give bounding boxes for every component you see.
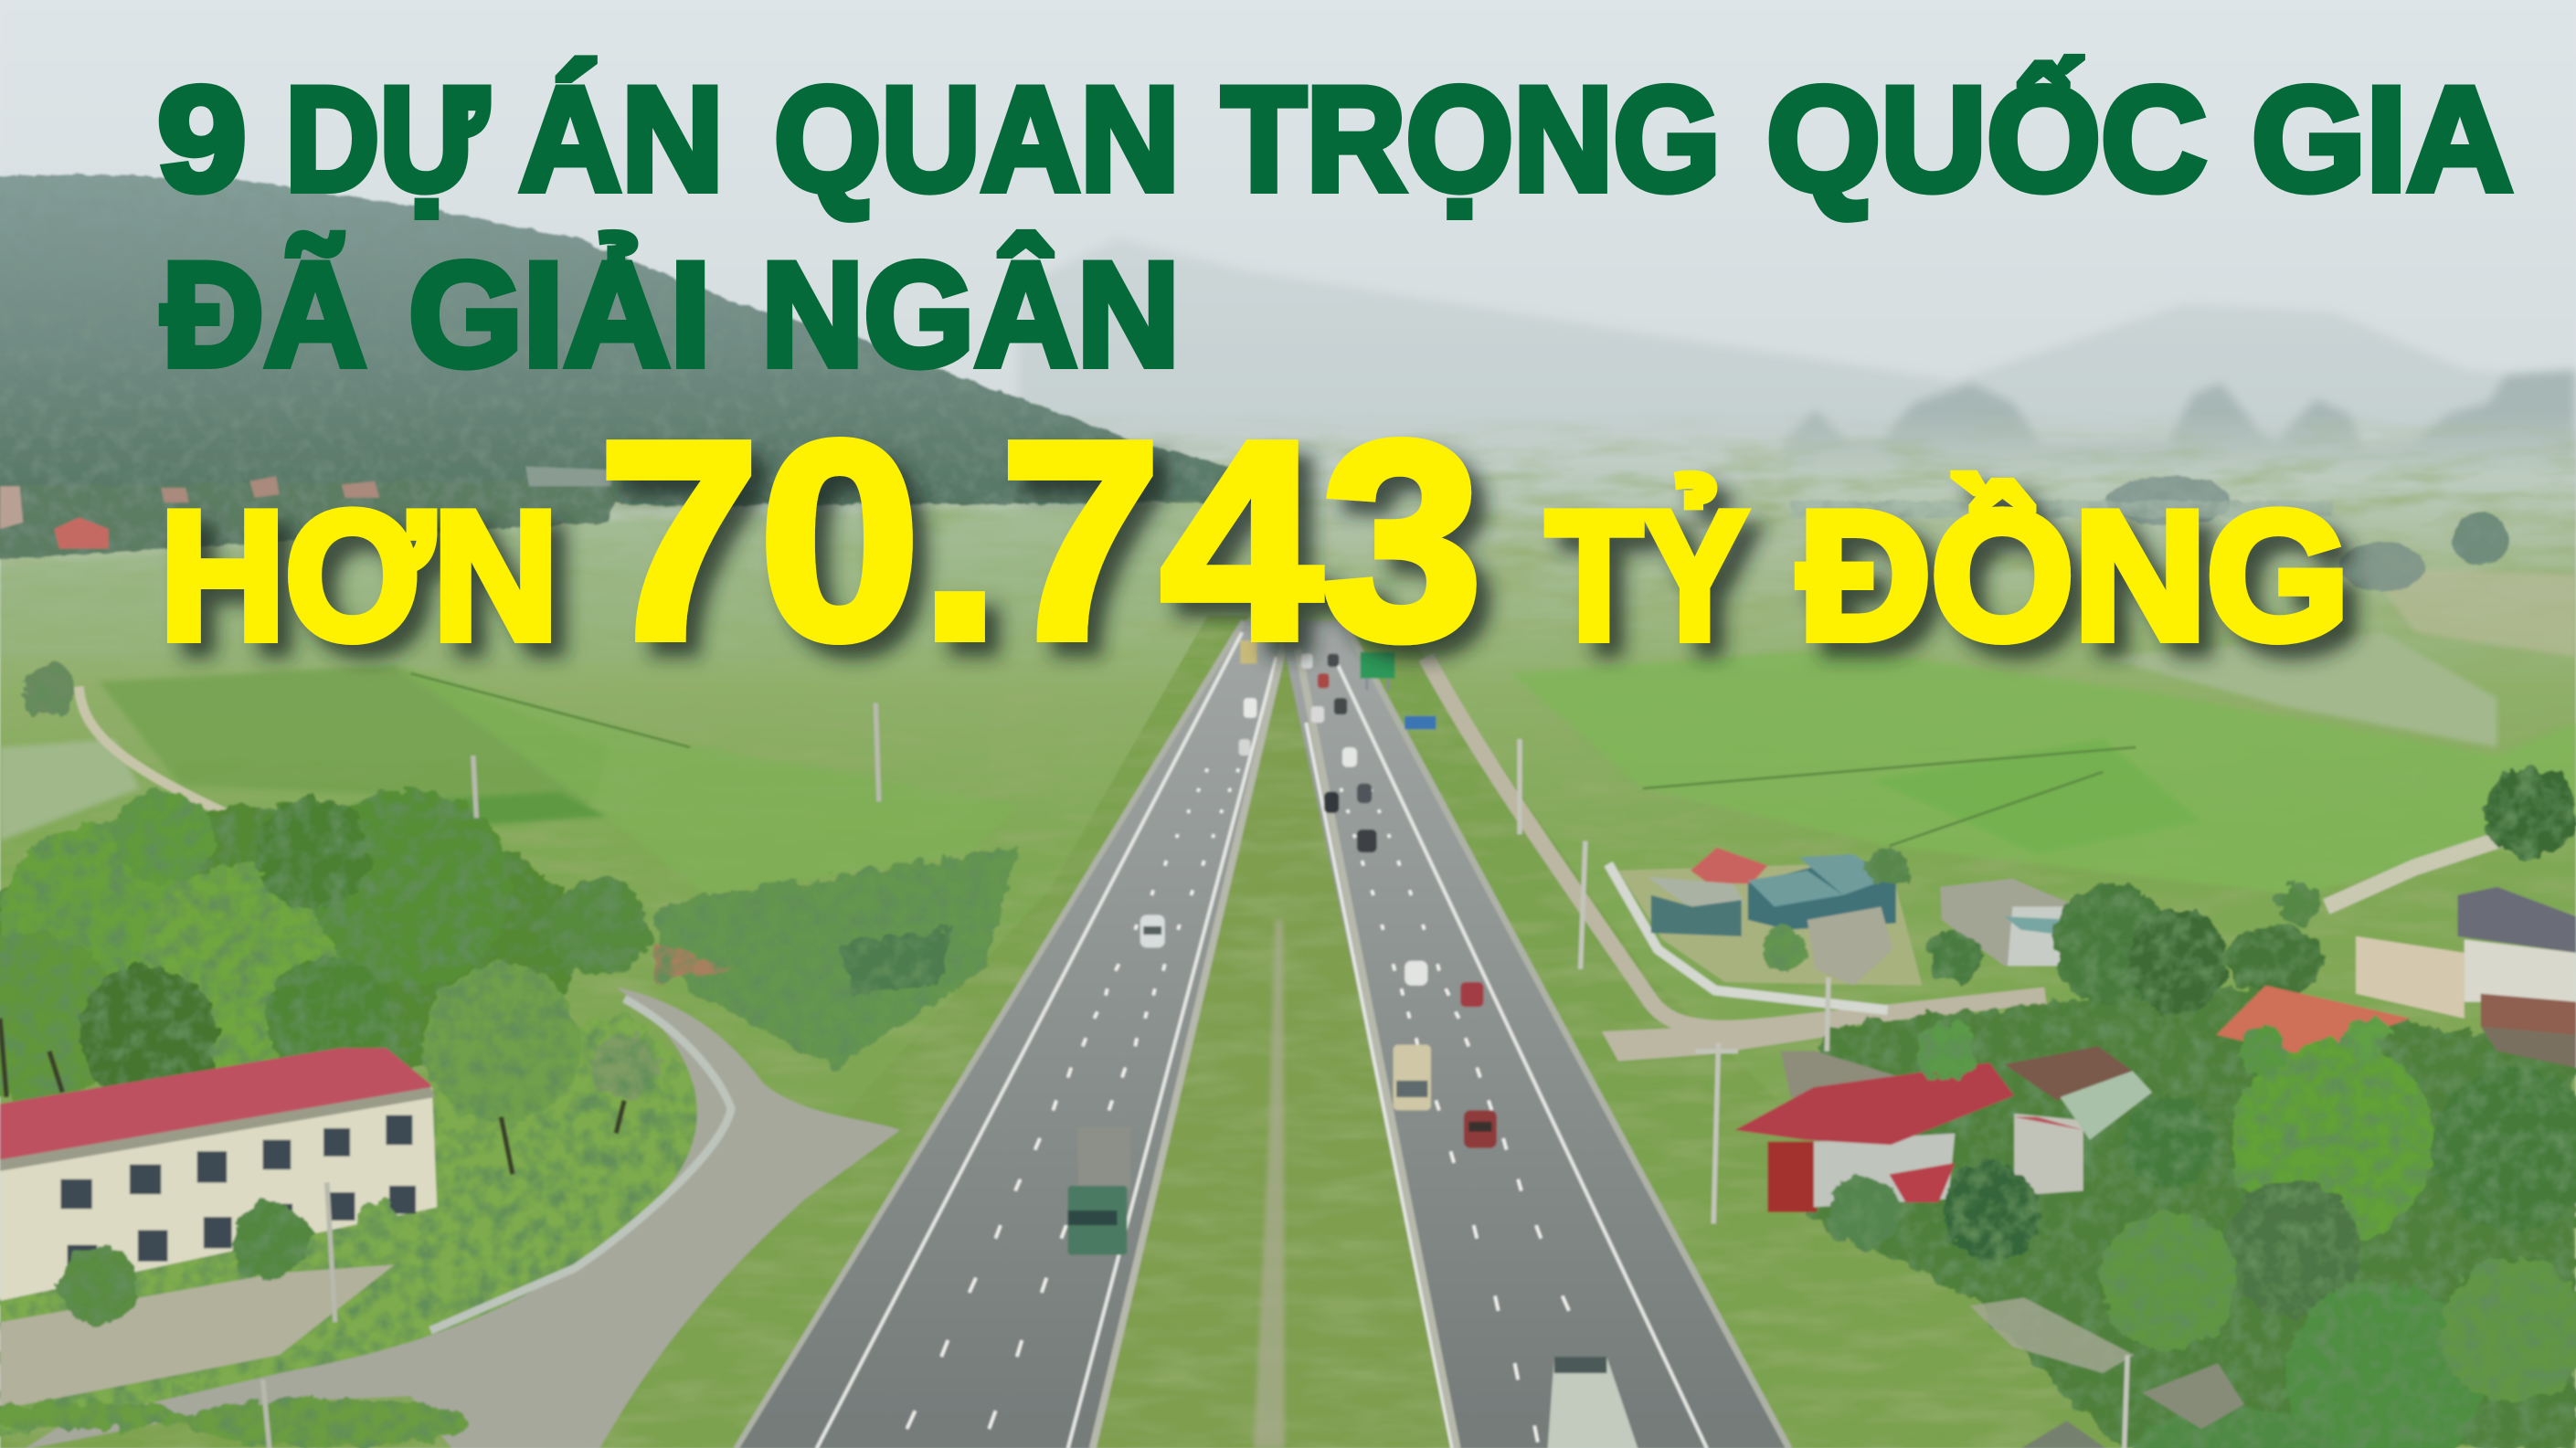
title line 1: TRỌNG (1222, 57, 1721, 222)
left forested mountain (0, 174, 1265, 506)
right carriageway (1278, 621, 1789, 1448)
sky (0, 0, 2576, 525)
median grass (1093, 621, 1458, 1448)
unit: ĐỒNG (1798, 474, 2349, 678)
distant mountains (1019, 238, 2576, 525)
village ground and greenery base (1807, 986, 2576, 1448)
utility poles left (263, 703, 879, 1448)
road junction (1602, 1015, 1840, 1061)
title line 1: GIA (2252, 57, 2513, 222)
embankments and bank grass (542, 616, 1248, 1448)
distant tree lines (1791, 476, 2508, 591)
title line 2: NGÂN (761, 232, 1180, 397)
right side lane (2327, 836, 2510, 906)
houses cluster upper (1648, 848, 2078, 986)
title line 1: QUỐC (1766, 57, 2207, 222)
bare ground yard (0, 1264, 394, 1410)
title line 2: ĐÃ (162, 232, 366, 397)
grass around building (0, 1010, 739, 1437)
field ridge lines (410, 673, 2136, 846)
utility poles right (1520, 739, 2127, 1448)
left hillside village (0, 467, 624, 562)
rubble and small sheds (1970, 1297, 2244, 1448)
building with red roof (0, 1048, 437, 1301)
yard ground (1618, 862, 1922, 986)
amount highlight (160, 384, 2349, 698)
right large houses (2216, 887, 2576, 1068)
lower right tree mass (1829, 1017, 2576, 1448)
left carriageway (736, 621, 1289, 1448)
left path (79, 687, 243, 821)
tree by left path (23, 663, 76, 716)
prefix: HƠN (160, 474, 558, 678)
title line 1: QUAN (774, 57, 1180, 222)
amount number: 70.743 (599, 384, 1482, 698)
tree trunks (0, 1019, 624, 1174)
title line 1: 9 (157, 57, 247, 222)
field patches (0, 501, 2576, 895)
title line 1 (157, 57, 2513, 222)
title line 1: DỰ (285, 57, 489, 222)
yard fence wall (1608, 864, 1888, 1010)
vehicles on left carriageway (1068, 640, 1256, 1255)
left-side access road (25, 988, 900, 1448)
road fence (430, 999, 731, 1330)
title line 2: GIẢI (408, 232, 711, 397)
title line 2 (162, 232, 1180, 397)
unit (1546, 474, 2349, 678)
red-roof roadside house (1735, 1046, 2152, 1212)
right-side service road (1426, 657, 2045, 1029)
title line 1: ÁN (519, 57, 724, 222)
vehicles on right carriageway (1301, 654, 1638, 1448)
vegetable plots beside highway (649, 846, 1019, 1068)
rice fields base (0, 410, 2576, 1448)
tree grove (0, 788, 657, 1122)
median dry strip (1254, 920, 1285, 1448)
palm and garden trees (1759, 767, 2576, 1013)
shrubs in front of building (0, 1200, 468, 1447)
highway signs (1361, 652, 1436, 729)
unit: TỶ (1546, 474, 1747, 678)
